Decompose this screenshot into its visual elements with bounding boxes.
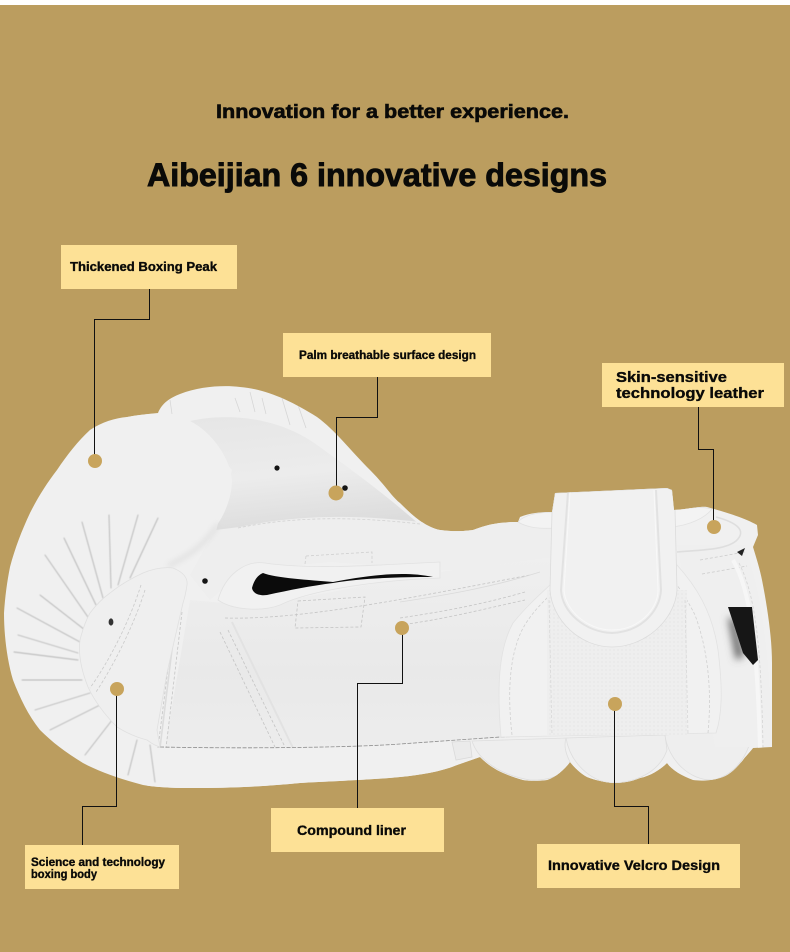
boxing glove illustration	[0, 380, 790, 800]
velcro flap	[550, 488, 677, 647]
marker dots	[88, 454, 721, 711]
lower body panel	[165, 556, 560, 750]
label: Skin-sensitive technology leather: technology leather	[616, 385, 764, 402]
palm cavity	[190, 417, 420, 535]
body stitching	[158, 575, 530, 748]
callout line: Palm breathable surface design	[336, 377, 378, 492]
vent holes	[109, 465, 348, 626]
callout line: Skin-sensitive technology leather	[698, 407, 714, 527]
label: Science and technology boxing body: Science and technology	[31, 857, 166, 869]
scallop padding	[472, 735, 749, 783]
hand slot	[252, 573, 433, 595]
label: Thickened Boxing Peak	[61, 245, 237, 289]
label: Palm breathable surface design: Palm breathable surface design	[299, 350, 476, 362]
callout line: Science and technology boxing body	[82, 689, 116, 845]
thumb	[90, 414, 230, 522]
black tag	[728, 607, 758, 665]
callout line: Compound liner	[358, 628, 402, 808]
strap opening padding	[218, 562, 440, 609]
tag shadow	[728, 617, 744, 660]
pleated finger folds	[14, 515, 158, 782]
wrist end and rear strap	[717, 726, 754, 747]
lower seam band	[147, 748, 753, 788]
callout line: Thickened Boxing Peak	[94, 289, 150, 461]
rear tabs	[518, 512, 552, 528]
label: Innovative Velcro Design: Innovative Velcro Design	[548, 857, 720, 873]
wrist cuff upper band	[215, 517, 512, 535]
title: Aibeijian 6 innovative designs	[147, 157, 607, 193]
callout line: Innovative Velcro Design	[614, 704, 648, 844]
elastic band frame	[499, 565, 721, 737]
thumb base pad	[79, 568, 187, 747]
label: Innovative Velcro Design	[537, 844, 740, 888]
label: Thickened Boxing Peak: Thickened Boxing Peak	[70, 259, 218, 274]
label: Science and technology boxing body: boxing body	[31, 869, 98, 881]
subtitle: Innovation for a better experience.	[216, 102, 569, 123]
label: Palm breathable surface design	[283, 333, 491, 377]
label: Skin-sensitive technology leather: Skin-sensitive	[616, 369, 727, 386]
mesh band	[547, 590, 687, 735]
label: Compound liner	[271, 808, 444, 852]
label: Science and technology boxing body	[25, 845, 179, 889]
label: Compound liner: Compound liner	[297, 822, 407, 838]
label: Skin-sensitive technology leather	[602, 363, 784, 407]
